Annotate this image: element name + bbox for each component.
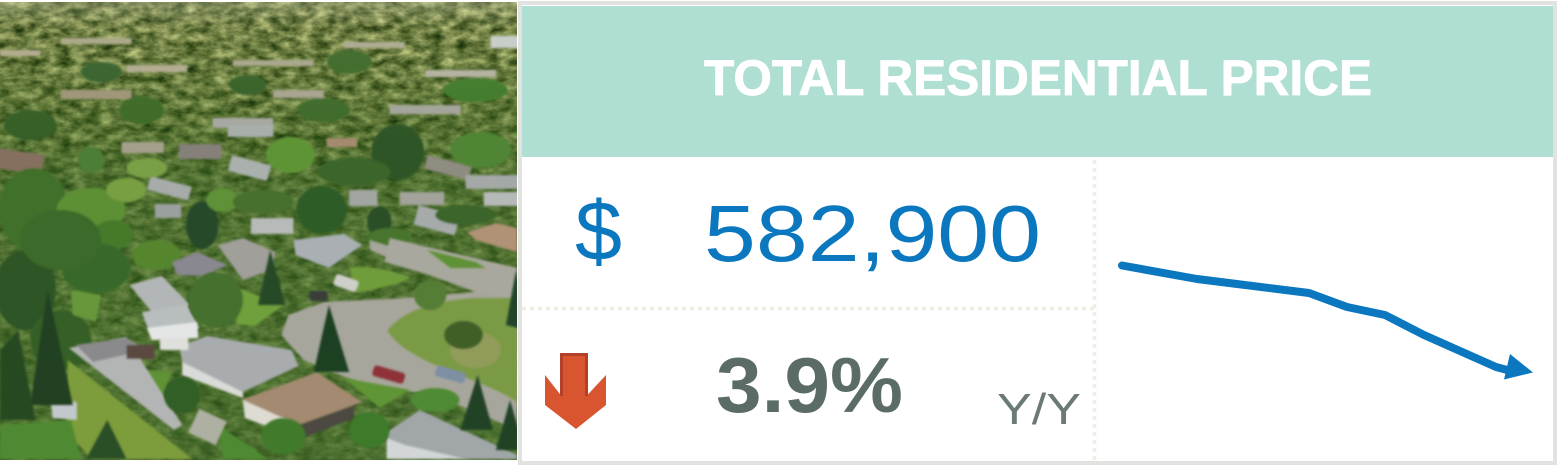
photo: mid-ground houses and trees [0, 124, 524, 370]
heading band [522, 6, 1553, 157]
year over year label: Y/Y [997, 385, 1081, 434]
photo: aerial view of residential neighbourhood [0, 0, 526, 460]
icon: red down arrow [545, 354, 606, 429]
photo: lawns [0, 250, 517, 459]
price value: 582,900 [704, 189, 1041, 278]
photo: street [281, 238, 517, 430]
price value row [575, 184, 1041, 278]
percentage change: 3.9% [716, 341, 903, 429]
dollar sign: $ [575, 184, 622, 278]
heading: total residential price: TOTAL RESIDENTIAL PRICE [704, 50, 1372, 106]
photo: foreground houses [51, 223, 517, 459]
panel: price card [520, 3, 1555, 463]
dotted cell dividers [522, 160, 1094, 460]
photo: distant roofs and tree canopy [0, 36, 523, 140]
trend line arrow [1122, 266, 1533, 380]
photo: conifers and cars [0, 250, 526, 459]
